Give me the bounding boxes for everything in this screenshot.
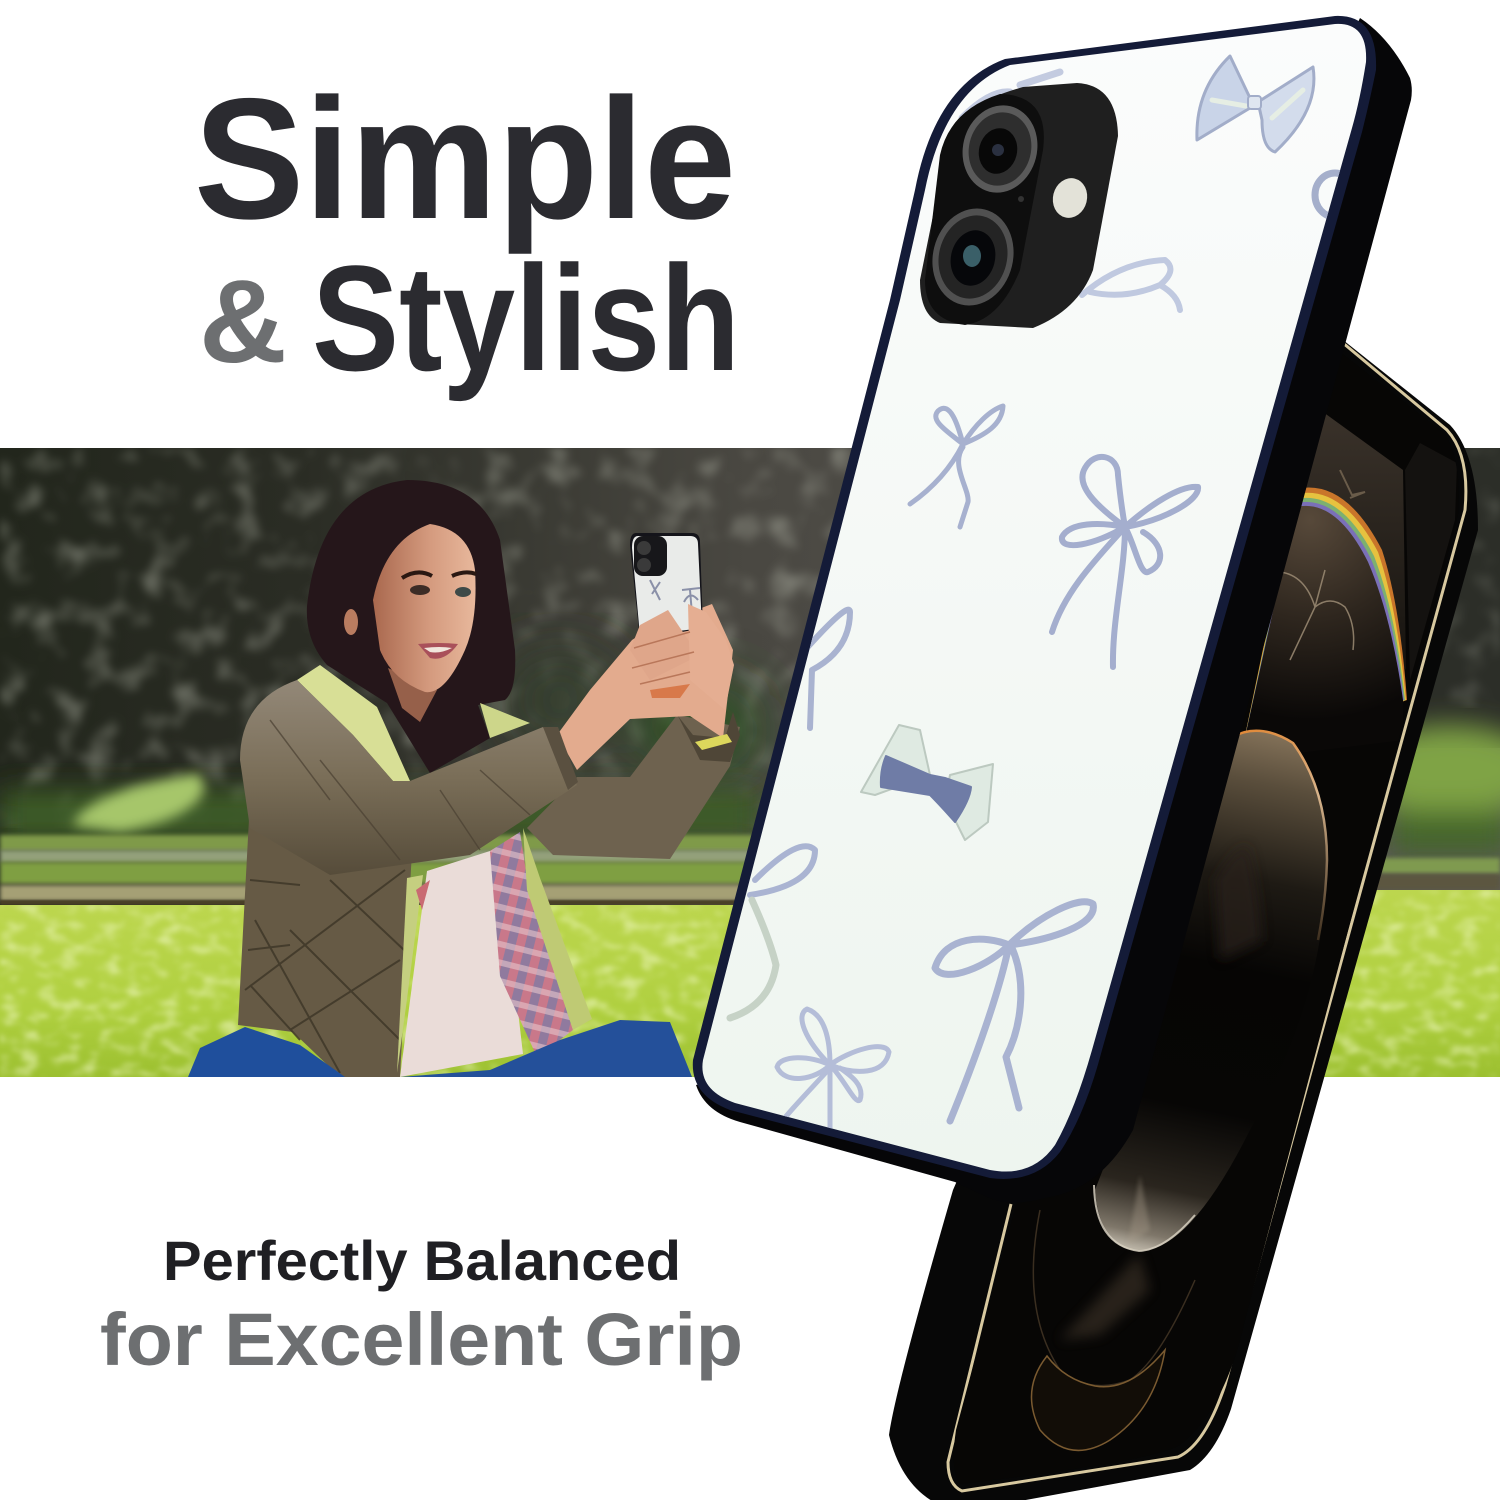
mini phone with case xyxy=(630,533,703,640)
fingers over phone xyxy=(634,610,683,640)
bow: right edge ring xyxy=(1312,170,1340,219)
title: Simple: Simple xyxy=(194,63,736,255)
mic dot xyxy=(1018,196,1024,202)
bow: bottom small bow xyxy=(775,1009,889,1135)
bow: top left faint ribbon xyxy=(962,72,1060,118)
tip flare xyxy=(1060,1254,1150,1340)
title: ampersand: & xyxy=(199,256,287,388)
case white face xyxy=(702,24,1366,1172)
plaid overshirt xyxy=(490,832,573,1057)
subheading: Perfectly Balanced: Perfectly Balanced xyxy=(163,1229,681,1292)
jacket torso xyxy=(238,821,412,1077)
sunlit hedge patch xyxy=(72,773,205,832)
camera module xyxy=(920,83,1118,328)
rainbow arc layers xyxy=(1246,488,1407,731)
lime collar xyxy=(297,665,410,781)
bow: striped top right xyxy=(1197,56,1314,152)
jeans xyxy=(188,1027,345,1077)
lime jacket lining xyxy=(397,875,423,1073)
lower wallpaper lobes xyxy=(1033,1210,1195,1386)
near cuff xyxy=(543,727,578,790)
star flare xyxy=(1280,570,1354,660)
case black side wall xyxy=(696,18,1412,1203)
bow: small loose bow xyxy=(910,406,1003,527)
panel: park photo band xyxy=(0,448,1500,1077)
gold rim xyxy=(948,343,1466,1491)
back phone: iPhone with screen xyxy=(889,340,1480,1500)
back phone black frame xyxy=(889,340,1478,1500)
lips xyxy=(418,643,458,659)
dark panel right of notch xyxy=(1405,443,1457,680)
neck xyxy=(388,668,437,722)
bow: solid blue and green xyxy=(861,725,993,840)
inner lobe tip xyxy=(1216,875,1262,957)
brown wallpaper panel xyxy=(1300,412,1406,670)
photo background: forest and lawn xyxy=(0,448,1500,1077)
bow: lower left loop with green tail xyxy=(750,846,815,895)
near sleeve xyxy=(240,680,577,875)
quilting seams xyxy=(245,870,405,1073)
orb rim light xyxy=(1232,731,1327,940)
golden orb xyxy=(1095,731,1327,1251)
case navy edge and face xyxy=(693,16,1376,1179)
ribbon pattern xyxy=(730,56,1355,1135)
title: Stylish: Stylish xyxy=(312,234,740,402)
far cuff and bracelet xyxy=(678,712,740,762)
front phone case xyxy=(693,16,1412,1203)
hands and forearm xyxy=(557,604,733,770)
subheading: for Excellent Grip: for Excellent Grip xyxy=(100,1298,743,1381)
screen wallpaper xyxy=(954,414,1456,1452)
shirt xyxy=(400,851,523,1077)
ear xyxy=(344,609,358,635)
flash xyxy=(1049,174,1091,222)
far sleeve xyxy=(527,715,740,859)
bow: large ribbon bow xyxy=(1052,457,1198,667)
bow: left edge ribbon xyxy=(805,610,850,728)
hair xyxy=(307,480,515,773)
woman taking a selfie xyxy=(188,480,740,1077)
face xyxy=(373,524,476,692)
bow: lower large ribbon bow xyxy=(935,902,1093,1121)
eyes and brows xyxy=(402,572,476,578)
bow: ribbon beside camera xyxy=(1082,260,1180,310)
upper lens xyxy=(953,97,1047,201)
lower lens xyxy=(922,200,1024,314)
